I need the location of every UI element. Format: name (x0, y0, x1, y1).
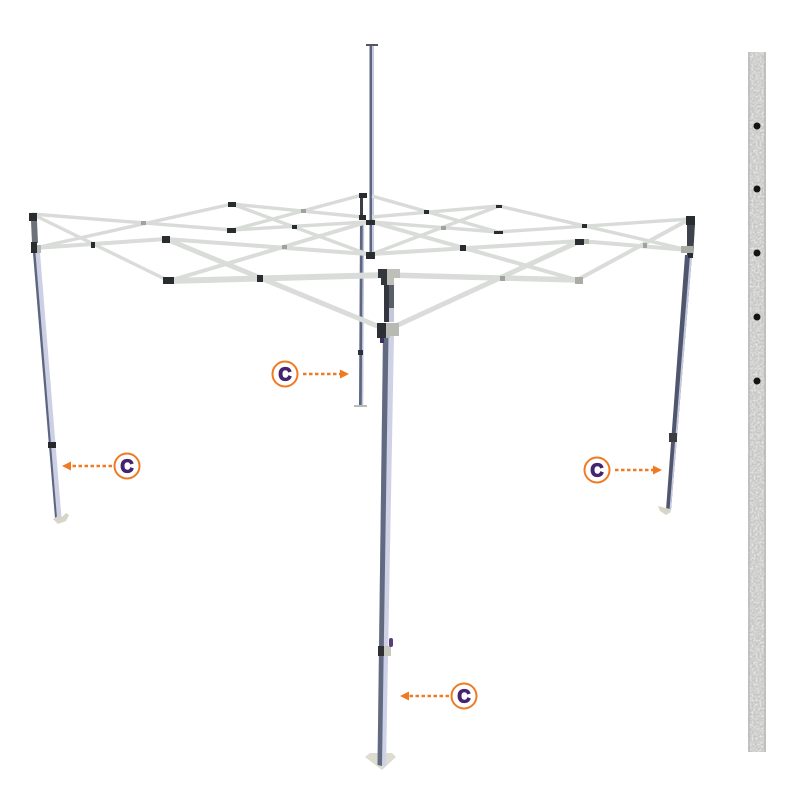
right foot plate (658, 506, 671, 515)
front corner leg (365, 269, 400, 770)
roof frame front trusses (32, 214, 690, 330)
callout: C right leg: C (590, 460, 604, 480)
frame joints (29, 193, 695, 284)
callout: C right leg (584, 458, 662, 482)
lower slider (377, 323, 399, 338)
callout: C back leg: C (278, 364, 292, 384)
callout: C left leg (62, 454, 140, 478)
callout: C front leg (400, 684, 476, 708)
back leg and center mast (354, 45, 378, 407)
callout: C back leg (272, 362, 349, 386)
textured pole detail with holes (748, 52, 766, 752)
front foot plate (365, 753, 396, 770)
left foot plate (53, 513, 69, 524)
callout: C front leg: C (458, 686, 470, 706)
front leg tube (378, 335, 394, 766)
callout: C left leg: C (120, 456, 134, 476)
top sleeve (384, 285, 389, 322)
height adjuster (378, 646, 391, 656)
right leg (658, 224, 695, 515)
left leg (31, 221, 69, 524)
roof frame rear trusses (32, 195, 690, 254)
